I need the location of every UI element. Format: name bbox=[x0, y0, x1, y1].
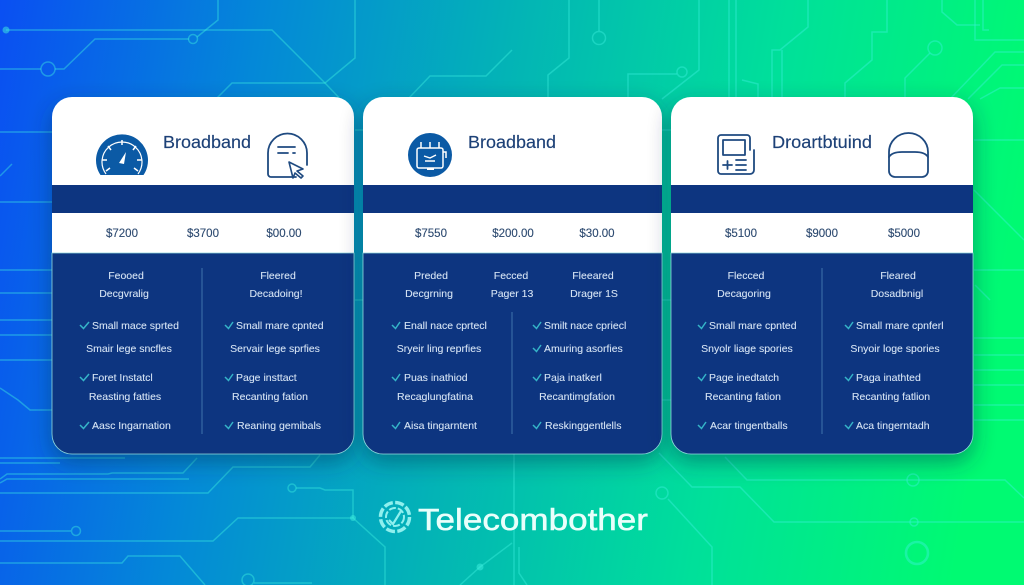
features column 2: Smilt nace cpriecl bbox=[544, 320, 626, 332]
features column 2: Recanting fatlion bbox=[852, 391, 930, 403]
features column 2: Small mare cpnferl bbox=[856, 320, 944, 332]
price row: $7550 bbox=[415, 228, 447, 240]
features column 1: Snyolr liage spories bbox=[701, 343, 793, 355]
features column 2: Paja inatkerl bbox=[544, 372, 602, 384]
features column 1: Recaglungfatina bbox=[397, 391, 473, 403]
panel: card 3 bbox=[671, 97, 973, 454]
features column 2: Small mare cpnted bbox=[236, 320, 324, 332]
card 1 background bbox=[52, 97, 354, 454]
features column 2: Servair lege sprfies bbox=[230, 343, 320, 355]
features column 1 bbox=[80, 270, 179, 432]
features column 2 bbox=[845, 270, 944, 432]
icon: form document bbox=[718, 135, 754, 174]
price row: $7200 bbox=[106, 228, 138, 240]
features column 1: Decagoring bbox=[717, 288, 771, 300]
price row: $00.00 bbox=[266, 228, 302, 240]
features column 1: Aisa tingarntent bbox=[404, 420, 477, 432]
features column 2: Amuring asorfies bbox=[544, 343, 623, 355]
price row: $5000 bbox=[888, 228, 920, 240]
features column 1: Enall nace cprtecl bbox=[404, 320, 487, 332]
features column 1: Sryeir ling reprfies bbox=[397, 343, 481, 355]
price row: $30.00 bbox=[579, 228, 615, 240]
icon: dome shape bbox=[889, 133, 928, 177]
features column 2: Reaning gemibals bbox=[237, 420, 321, 432]
column divider bbox=[201, 268, 203, 434]
column headers: Fecced bbox=[494, 270, 528, 282]
features column 2: Fleared bbox=[880, 270, 916, 282]
column headers bbox=[405, 270, 618, 300]
column headers: Preded bbox=[414, 270, 448, 282]
card 2 background bbox=[363, 97, 662, 454]
price row bbox=[415, 228, 615, 240]
features column 2 bbox=[225, 270, 324, 432]
features column 2: Recantimgfation bbox=[539, 391, 615, 403]
features column 1 bbox=[392, 320, 487, 432]
features column 1: Foret Instatcl bbox=[92, 372, 153, 384]
price row: $3700 bbox=[187, 228, 219, 240]
column headers: Drager 1S bbox=[570, 288, 618, 300]
panel: card 2 bbox=[363, 97, 662, 454]
card 3 background bbox=[671, 97, 973, 454]
price row bbox=[106, 228, 302, 240]
price row: $9000 bbox=[806, 228, 838, 240]
features column 1: Page inedtatch bbox=[709, 372, 779, 384]
features column 1: Smair lege sncfles bbox=[86, 343, 172, 355]
heading: Broadband: Broadband bbox=[468, 132, 556, 152]
heading: Droartbtuind: Droartbtuind bbox=[772, 132, 872, 152]
features column 1: Feooed bbox=[108, 270, 144, 282]
price row bbox=[725, 228, 920, 240]
price row: $200.00 bbox=[492, 228, 534, 240]
features column 1: Acar tingentballs bbox=[710, 420, 788, 432]
column divider bbox=[511, 312, 513, 434]
features column 2: Fleered bbox=[260, 270, 296, 282]
features column 1: Small mare cpnted bbox=[709, 320, 797, 332]
icon: tablet device bbox=[408, 133, 452, 177]
features column 1: Small mace sprted bbox=[92, 320, 179, 332]
features column 1: Decgvralig bbox=[99, 288, 149, 300]
panel: card 1 bbox=[52, 97, 354, 454]
features column 2: Recanting fation bbox=[232, 391, 308, 403]
icon: logo globe bbox=[380, 502, 410, 532]
column headers: Fleeared bbox=[572, 270, 614, 282]
price row: $5100 bbox=[725, 228, 757, 240]
features column 1: Puas inathiod bbox=[404, 372, 468, 384]
icon: speedometer bbox=[96, 134, 148, 175]
features column 2: Paga inathted bbox=[856, 372, 921, 384]
features column 2: Dosadbnigl bbox=[871, 288, 923, 300]
wordmark: Telecombother bbox=[418, 502, 648, 537]
logo: Telecombother bbox=[380, 502, 648, 537]
features column 2: Aca tingerntadh bbox=[856, 420, 930, 432]
features column 1 bbox=[698, 270, 797, 432]
features column 2: Snyoir loge spories bbox=[850, 343, 940, 355]
features column 1: Reasting fatties bbox=[89, 391, 161, 403]
heading: Broadband: Broadband bbox=[163, 132, 251, 152]
features column 2: Decadoing! bbox=[249, 288, 303, 300]
features column 2: Reskinggentlells bbox=[545, 420, 621, 432]
column headers: Pager 13 bbox=[491, 288, 533, 300]
features column 1: Recanting fation bbox=[705, 391, 781, 403]
column divider bbox=[821, 268, 823, 434]
column headers: Decgrning bbox=[405, 288, 453, 300]
icon: document with cursor bbox=[268, 134, 307, 178]
features column 1: Aasc Ingarnation bbox=[92, 420, 171, 432]
features column 2 bbox=[533, 320, 626, 432]
features column 1: Flecced bbox=[728, 270, 765, 282]
features column 2: Page insttact bbox=[236, 372, 297, 384]
